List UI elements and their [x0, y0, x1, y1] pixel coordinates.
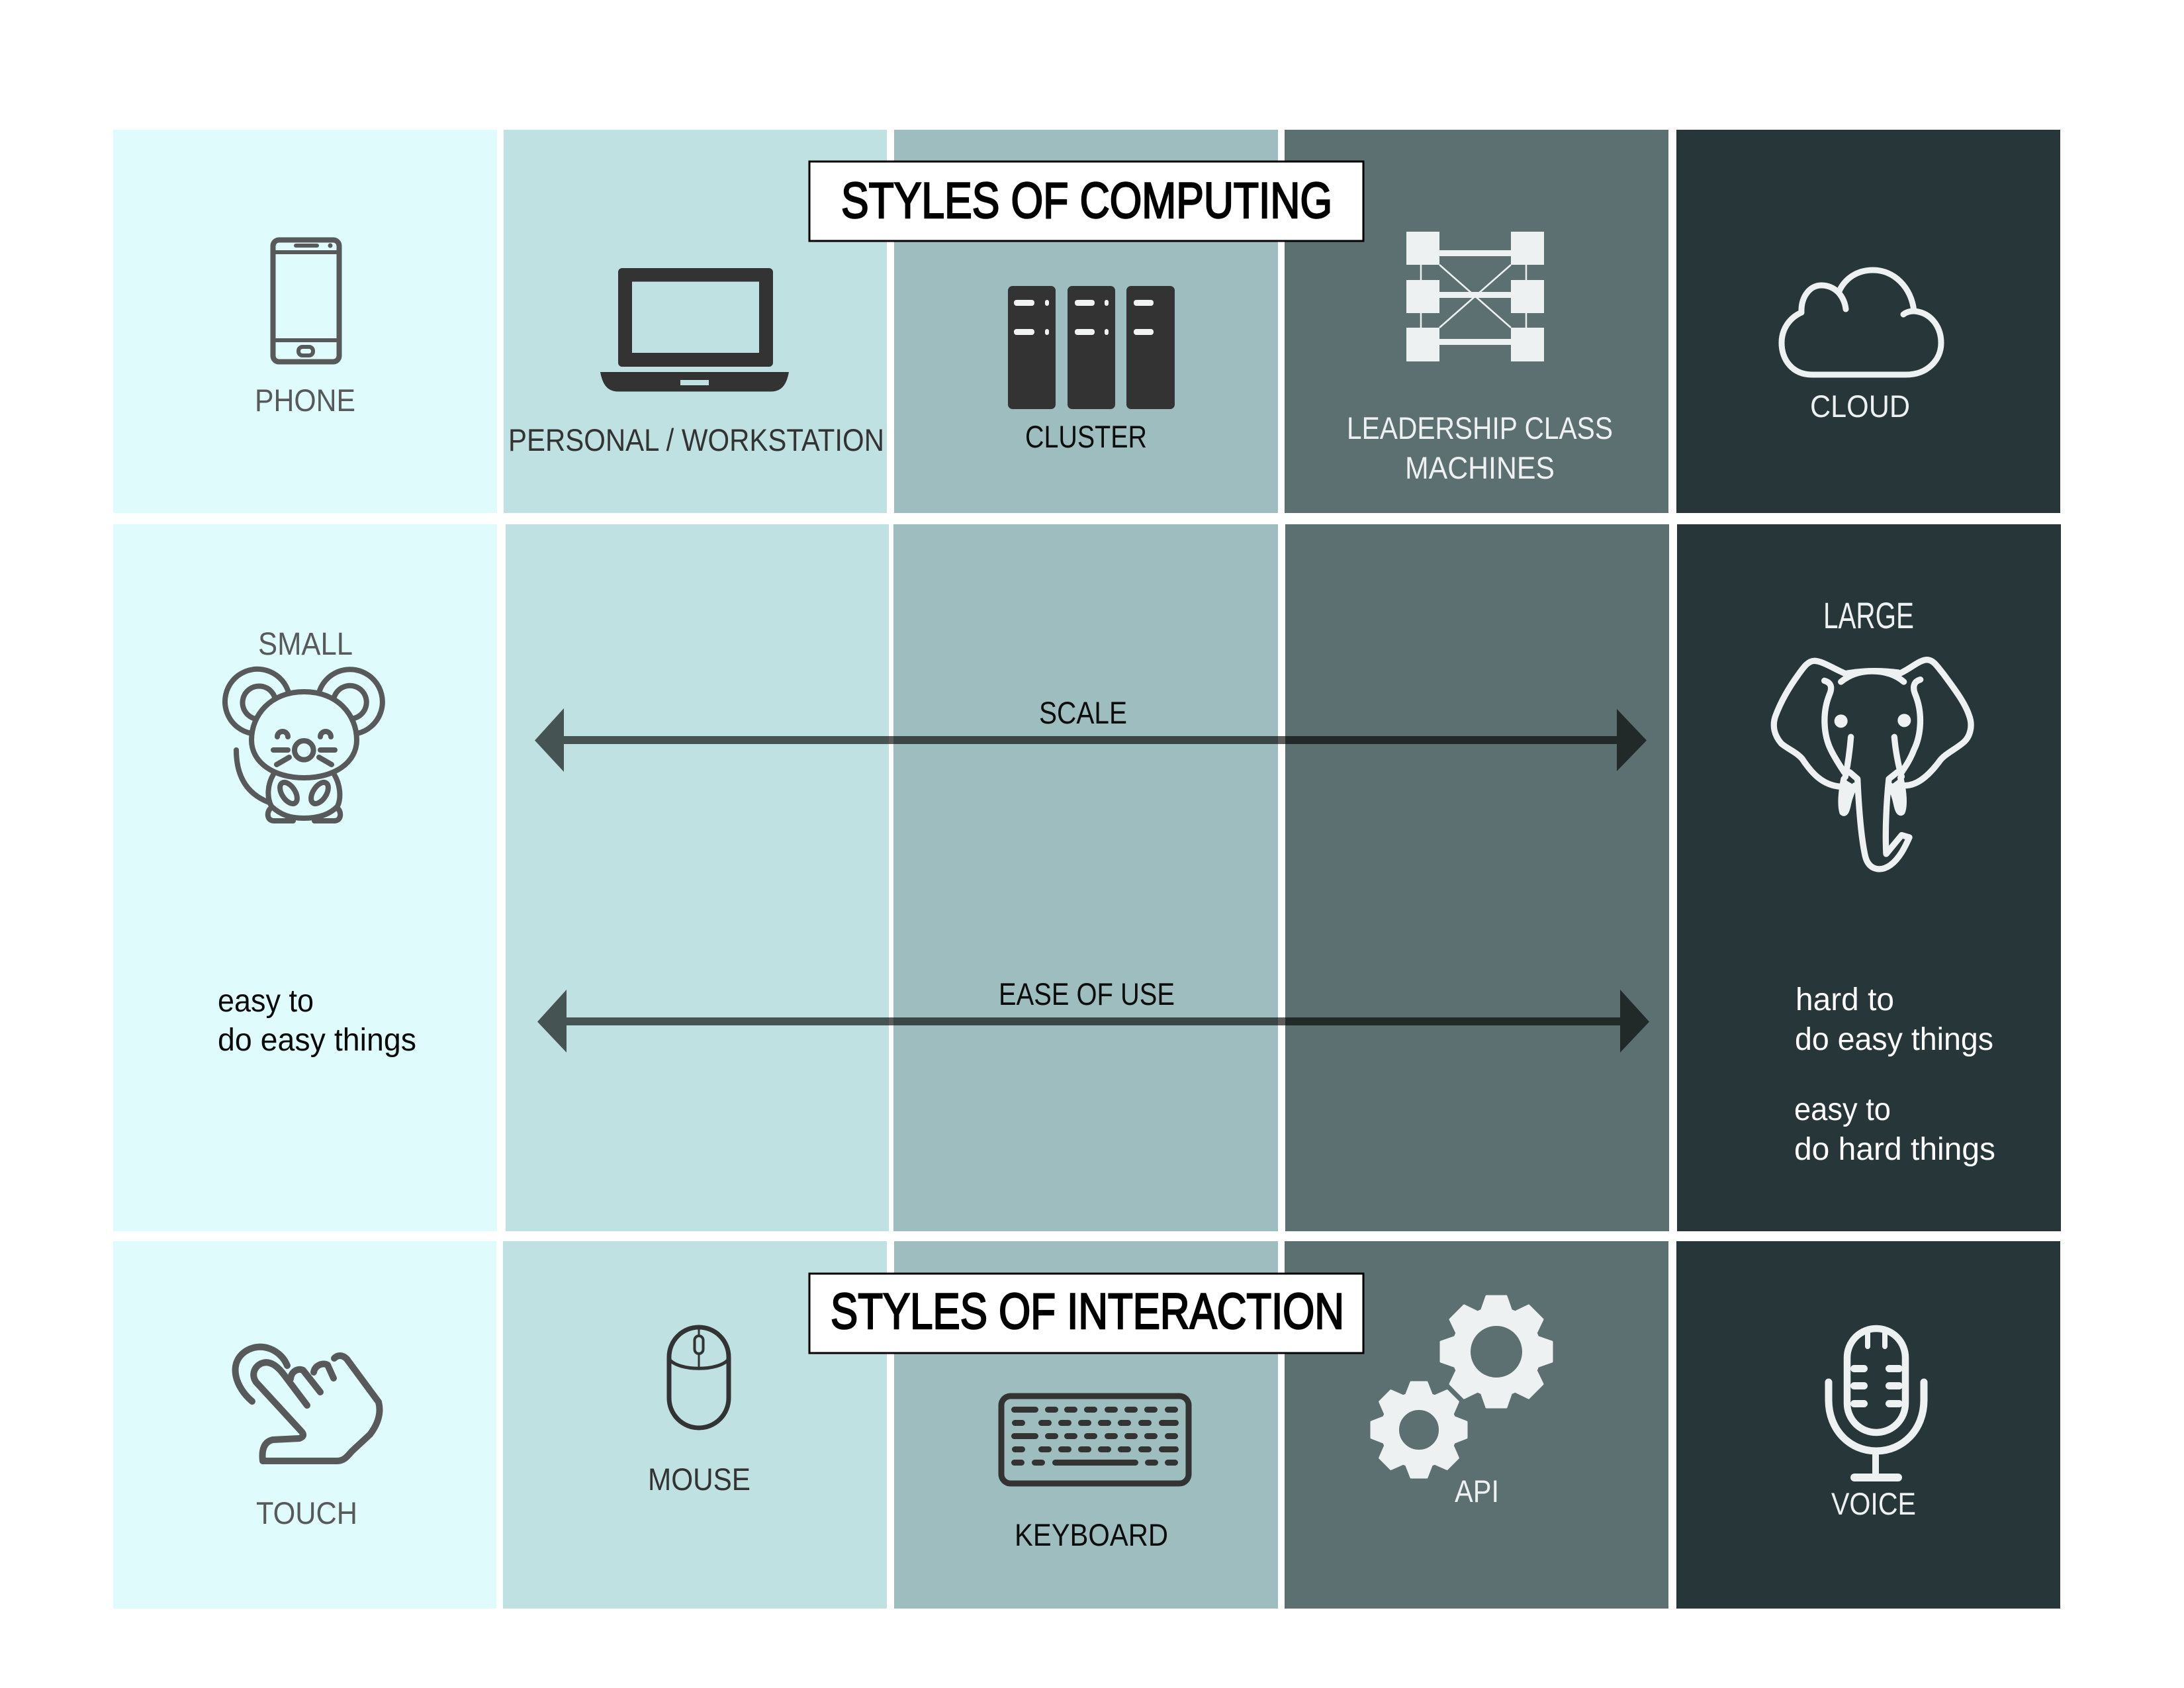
- icon: elephant: [1774, 660, 1971, 869]
- icon: leadership class network: [1406, 232, 1544, 361]
- panel: top row computing columns: [113, 130, 2060, 513]
- panel: bottom row interaction columns: [113, 1241, 2060, 1609]
- arrow: scale: [535, 708, 1647, 772]
- heading: styles of computing: STYLES OF COMPUTING: [841, 173, 1332, 229]
- label: keyboard: KEYBOARD: [1015, 1517, 1168, 1552]
- label: leadership class machines: MACHINES: [1405, 450, 1555, 485]
- label: mouse: MOUSE: [648, 1462, 751, 1497]
- icon: phone: [273, 240, 340, 361]
- text: easy to do easy things: do easy things: [218, 1023, 416, 1058]
- label: cloud: CLOUD: [1810, 389, 1910, 424]
- label: personal workstation: PERSONAL / WORKSTATION: [508, 422, 884, 457]
- label: ease of use: EASE OF USE: [999, 976, 1175, 1011]
- heading: styles of interaction: [809, 1274, 1363, 1353]
- icon: cloud: [1782, 270, 1941, 375]
- label: voice: VOICE: [1831, 1486, 1916, 1521]
- heading: styles of interaction: STYLES OF INTERACTION: [831, 1284, 1344, 1340]
- label: phone: PHONE: [255, 383, 355, 418]
- label: api: API: [1455, 1474, 1499, 1509]
- panel: middle row scale and ease of use columns: [113, 524, 2061, 1231]
- heading: styles of computing: [809, 162, 1363, 241]
- icon: gears: [1371, 1296, 1552, 1477]
- icon: keyboard: [1001, 1396, 1189, 1483]
- text: hard to do easy things, easy to do hard things: [1794, 982, 1995, 1167]
- text: hard to do easy things, easy to do hard things: easy to: [1794, 1092, 1891, 1127]
- icon: touch hand: [236, 1347, 379, 1461]
- label: large: LARGE: [1823, 594, 1914, 636]
- icon: laptop: [600, 268, 789, 392]
- text: easy to do easy things: [218, 984, 416, 1058]
- label: touch: TOUCH: [256, 1495, 357, 1530]
- label: leadership class machines: LEADERSHIP CLASS: [1347, 410, 1613, 445]
- label: leadership class machines: [1347, 410, 1613, 485]
- label: small: SMALL: [258, 627, 353, 662]
- text: hard to do easy things, easy to do hard things: do hard things: [1794, 1132, 1995, 1167]
- icon: server cluster: [1008, 286, 1175, 409]
- text: hard to do easy things, easy to do hard things: do easy things: [1795, 1022, 1993, 1057]
- icon: mouse animal: [225, 669, 383, 821]
- icon: computer mouse: [669, 1327, 729, 1428]
- label: scale: SCALE: [1039, 695, 1127, 730]
- arrow: ease of use: [537, 990, 1649, 1053]
- text: easy to do easy things: easy to: [218, 984, 314, 1019]
- text: hard to do easy things, easy to do hard things: hard to: [1796, 982, 1894, 1017]
- label: cluster: CLUSTER: [1025, 419, 1147, 454]
- icon: microphone: [1829, 1329, 1924, 1481]
